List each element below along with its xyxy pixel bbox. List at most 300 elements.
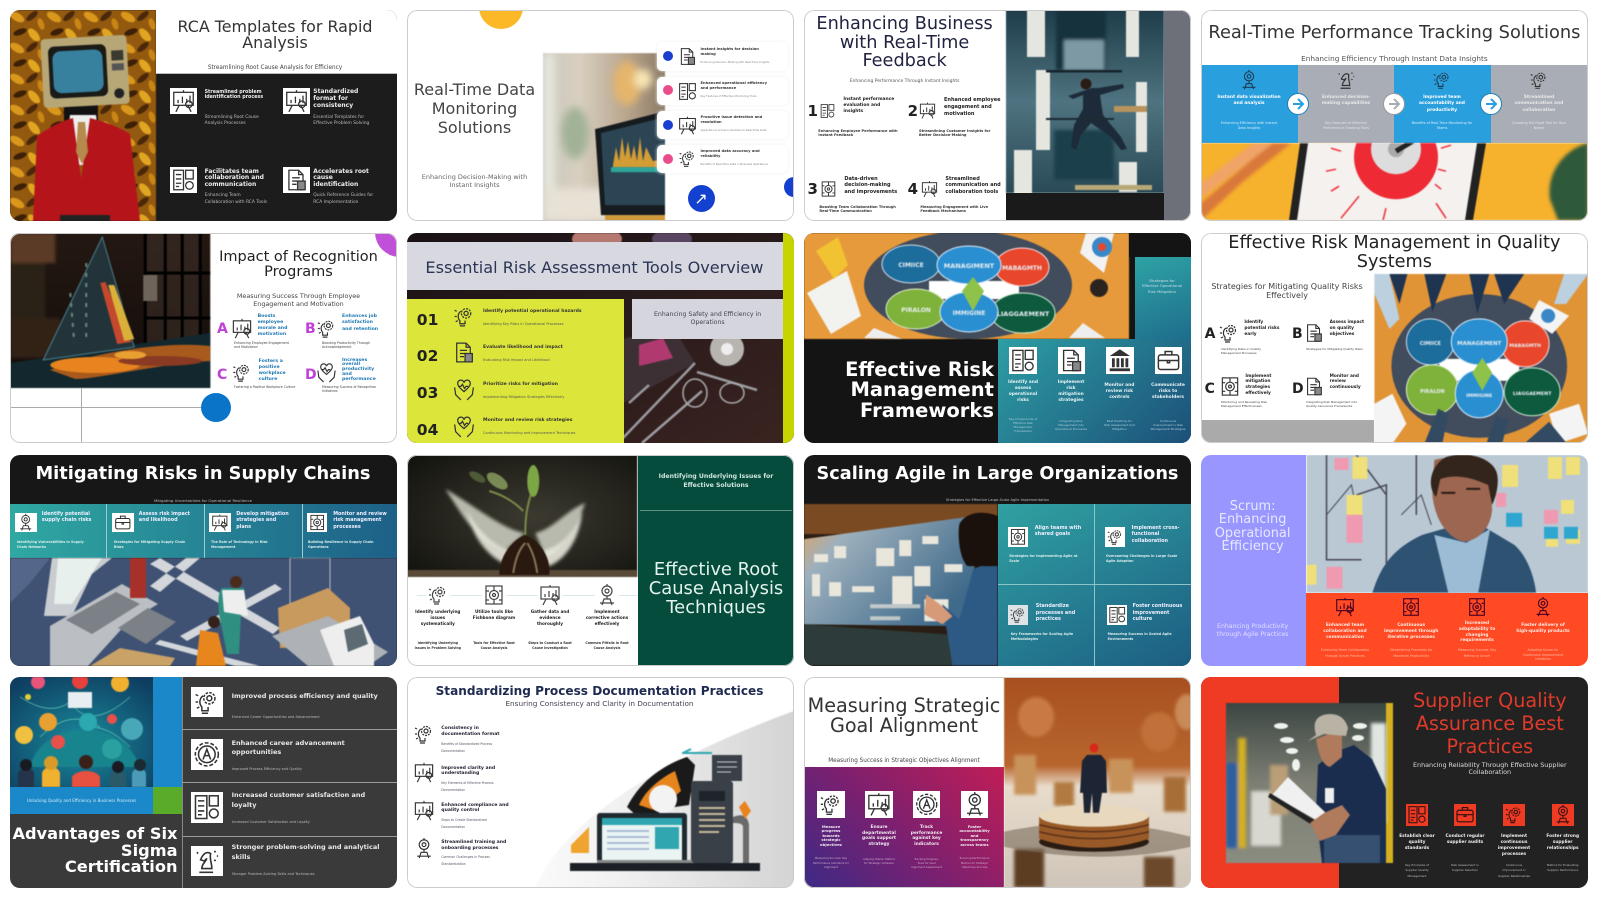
item description: Strategies for Implementing Agile at — [1009, 554, 1077, 558]
item heading: high-quality products — [1516, 629, 1570, 634]
item heading: strategies — [1245, 385, 1270, 390]
title: Essential Risk Assessment Tools Overview — [425, 258, 763, 276]
subtitle: Enhancing Productivity — [1217, 623, 1288, 630]
button: arrow — [688, 184, 714, 212]
item heading: Foster continuous — [1133, 603, 1182, 609]
photo: meeting table overhead: LIAGGAEMENT — [1512, 390, 1552, 396]
item description: and Motivation — [234, 345, 258, 349]
item heading: supplier audits — [1447, 840, 1483, 845]
item heading: onboarding processes — [441, 846, 498, 851]
button: partial circle — [784, 177, 804, 197]
item description — [818, 128, 898, 137]
teal grid — [998, 504, 1191, 666]
item heading: collaboration — [1132, 538, 1168, 544]
item description: Enhanced Career Opportunities and Advancement — [232, 715, 320, 719]
number 2: 2 — [908, 102, 918, 120]
item description: Identifying Risks in Quality — [1221, 347, 1261, 351]
bullet — [663, 154, 673, 164]
column 4 — [1490, 65, 1588, 143]
subtitle: Enhancing Efficiency Through Instant Data Insights — [1301, 54, 1488, 63]
photo: meeting table with overlapping circles: CIMIICE — [898, 262, 924, 268]
item description — [313, 114, 369, 126]
item description: Key Features of Effective Monitoring Tools — [700, 94, 757, 98]
icon: gears head — [1530, 72, 1546, 89]
item heading — [236, 511, 289, 531]
icon: improvement — [1107, 605, 1127, 625]
title — [845, 360, 994, 421]
item description: Steps to Conduct a Root — [528, 640, 572, 644]
icon: person target — [1532, 596, 1554, 618]
item description: Metrics for Evaluating — [1547, 863, 1578, 867]
item description: Continuous Monitoring and Improvement Techniques — [483, 431, 576, 435]
item description: Essential Templates for — [313, 114, 364, 120]
title: with Real-Time — [840, 32, 969, 52]
item heading: Identify underlying — [415, 609, 460, 614]
item description: Documentation — [441, 749, 465, 753]
item description: Aligning Teams: Matrics — [863, 857, 895, 861]
item heading: cause — [313, 174, 333, 181]
item description: Feedback Mechanisms — [920, 209, 966, 213]
icon: network — [1400, 596, 1422, 618]
item heading: accountability — [959, 828, 990, 833]
item heading: continuous — [1501, 840, 1527, 845]
item heading — [700, 114, 762, 124]
item heading: Foster — [968, 824, 981, 829]
item heading: motivation — [944, 110, 974, 116]
item heading: making — [700, 52, 716, 56]
item heading: Standardized — [313, 88, 358, 95]
item description: Key Elements of Effective Process — [441, 781, 493, 785]
header band — [156, 10, 398, 74]
item heading: relationships — [1547, 846, 1579, 851]
item heading — [700, 80, 767, 90]
subtitle: Engagement and Motivation — [253, 300, 344, 308]
item heading: Measure — [822, 824, 840, 829]
item heading: Instant performance — [843, 97, 894, 102]
item description: Cause Analysis — [481, 646, 507, 650]
item description: Choosing the Right Tool for Your — [1512, 120, 1566, 124]
item heading — [1419, 95, 1465, 114]
item heading: Implement — [594, 609, 620, 614]
item description: Integrating Risk Management into — [1306, 400, 1357, 404]
item description: Metrics in Scrum — [1464, 654, 1490, 658]
item description — [17, 540, 84, 549]
title: Real-Time Performance Tracking Solutions — [1208, 22, 1580, 43]
decoration: purple corner — [375, 206, 425, 256]
title: Effective Root — [654, 559, 778, 580]
subtitle: Measuring Success Through Employee — [237, 292, 360, 300]
card: insight 4 — [657, 145, 788, 173]
item heading: Enhanced team — [1326, 623, 1364, 628]
item description: Applications Across Industries for Real-Time Data — [700, 128, 766, 132]
card: insight 1 — [657, 42, 788, 71]
subtitle — [1217, 623, 1288, 640]
photo: meeting table with overlapping circles: LIAGGAEMENT — [997, 310, 1050, 318]
item heading: Implement — [1058, 380, 1084, 384]
icon: target — [595, 583, 619, 607]
icon: truck — [112, 513, 134, 532]
item heading: Increases — [342, 358, 367, 362]
icon: hands with stars — [315, 360, 338, 384]
title: Certification — [65, 857, 178, 876]
item description — [313, 192, 374, 205]
item description: Boosting Team Collaboration Through — [819, 205, 896, 209]
item heading — [232, 739, 345, 757]
item heading — [204, 168, 264, 188]
item description: Boosting Productivity Through — [322, 341, 370, 345]
item description — [528, 640, 572, 650]
item heading: supply chain risks — [42, 517, 91, 523]
item description: Measuring Success: Key — [815, 856, 847, 860]
subtitle — [654, 311, 761, 326]
photo: meeting table overhead: MANAGEMENT — [1457, 340, 1501, 346]
item heading: objectives — [820, 842, 842, 847]
item description: Operations — [308, 545, 329, 549]
item heading: reliability — [700, 154, 720, 158]
item heading: Prioritize risks for mitigation — [483, 382, 558, 386]
item heading: early — [1244, 332, 1257, 336]
item heading: supplier — [1553, 840, 1573, 845]
item description: Continuous — [1160, 418, 1176, 422]
purple column — [1201, 455, 1306, 666]
blue caption band — [10, 787, 153, 814]
row divider — [182, 835, 397, 838]
item description: Supplier Performance — [1547, 868, 1578, 872]
item heading: and analysis — [1234, 101, 1264, 106]
icon: board — [230, 316, 254, 340]
item description: Common Pitfalls in Root — [585, 640, 629, 644]
number 3: 3 — [808, 180, 818, 198]
item heading: accountability and — [1419, 101, 1465, 106]
item heading — [441, 840, 506, 851]
item description: Measuring Engagement with Live — [920, 205, 988, 209]
title: Frameworks — [860, 399, 994, 422]
title: Goal Alignment — [830, 714, 978, 737]
item heading — [1104, 382, 1134, 400]
title: Effective Risk Management in Quality — [1228, 233, 1560, 253]
icon: media — [1218, 374, 1242, 398]
item description — [441, 854, 490, 868]
item description: Risk Assessment in — [1451, 863, 1479, 867]
item heading: Streamlined — [945, 176, 980, 182]
subtitle: Collaboration — [1468, 768, 1511, 776]
title: Monitoring — [432, 99, 517, 118]
item heading: Enhances job — [342, 314, 377, 318]
title — [649, 561, 783, 617]
title: Programs — [264, 264, 333, 280]
panel: Effective Risk Management Frameworks — [804, 232, 1191, 443]
number 01: 01 — [417, 310, 438, 328]
item description — [1523, 648, 1563, 662]
item heading — [1322, 95, 1370, 108]
title — [1228, 234, 1560, 272]
photo: glowing pyramid in dark room — [10, 232, 210, 388]
item description: Collaboration with RCA Tools — [205, 200, 267, 205]
item description: Streamlining Root Cause — [205, 114, 259, 120]
item heading: thoroughly — [537, 621, 563, 626]
item description: Tracking Progress: — [914, 857, 939, 861]
item description: Continuous Improvement — [1523, 653, 1563, 657]
grey strip — [1164, 10, 1191, 221]
icon: monitoring — [307, 513, 327, 532]
item description: Risks — [114, 545, 124, 549]
item description — [1306, 401, 1357, 409]
item description: Improved Process Efficiency and Quality — [232, 767, 302, 771]
icon: audit — [1454, 804, 1476, 826]
arrow 2 — [1383, 93, 1405, 115]
blue strip — [153, 677, 182, 787]
item heading — [259, 358, 286, 382]
item heading — [1036, 603, 1075, 623]
item heading: engagement and — [944, 104, 992, 110]
item description — [322, 342, 370, 350]
panel: Measuring Strategic Goal Alignment — [804, 677, 1191, 888]
panel: Scaling Agile in Large Organizations — [804, 455, 1191, 666]
item heading: Implement — [1245, 374, 1271, 378]
panel: Scrum: Enhancing Operational Efficiency — [1201, 455, 1588, 666]
title — [816, 14, 993, 71]
item description: Fostering a Positive Workplace Culture — [234, 385, 295, 389]
icon: strategy board — [412, 799, 436, 822]
item heading: culture — [1133, 616, 1152, 622]
item heading: Consistency in — [441, 726, 479, 731]
item heading — [441, 726, 500, 737]
item description: Instant Feedback — [818, 133, 853, 137]
item heading — [1058, 380, 1084, 404]
item heading: improvement through — [1384, 629, 1438, 634]
item description — [1009, 416, 1037, 433]
photo: meeting table overhead: IMMIGINE — [1466, 392, 1492, 398]
gradient panel — [804, 767, 1004, 888]
card: insight 2 — [657, 77, 788, 105]
item heading: operational — [1009, 392, 1037, 396]
item description: Measuring Success of Recognition — [322, 385, 376, 389]
item heading: and — [970, 833, 978, 838]
item description: Alignment — [824, 865, 838, 869]
letter C: C — [1205, 381, 1215, 397]
item description: Identifying Underlying — [418, 640, 458, 644]
icon: pie chart — [170, 167, 197, 193]
item description: Management Effectiveness — [1221, 404, 1262, 408]
panel: Real-Time Performance Tracking Solutions — [1201, 10, 1588, 221]
item description: for Strategic Cohesion — [864, 861, 894, 865]
item heading: Continuous — [1397, 623, 1425, 628]
icon: plans — [209, 513, 231, 532]
item heading: review — [1330, 379, 1346, 384]
item description: Risk Assessment and — [1104, 423, 1135, 427]
subtitle: Enhancing Safety and Efficiency in — [654, 311, 761, 318]
item description — [322, 386, 376, 394]
panel: Essential Risk Assessment Tools Overview — [407, 232, 794, 443]
item description: Benefits of Real-Time Data in Business Operations — [700, 162, 768, 166]
item description — [1055, 418, 1087, 431]
item description — [819, 205, 896, 213]
item heading: potential risks — [1244, 326, 1279, 330]
item description: Data Insights — [1238, 126, 1260, 130]
title: Impact of Recognition — [219, 249, 378, 265]
title: Effective Risk — [845, 358, 994, 381]
item heading: Boosts — [258, 314, 275, 318]
panel: RCA Templates for Rapid Analysis — [10, 10, 397, 221]
photo: dark desk with pens and glasses — [407, 232, 794, 444]
item heading — [1384, 623, 1438, 641]
title: Analysis — [242, 33, 308, 52]
item description — [1104, 418, 1135, 431]
item heading: employee — [258, 320, 283, 324]
icon: briefcase — [1155, 346, 1182, 374]
item description: Implementing Mitigation Strategies Effectively — [483, 395, 564, 399]
item heading: Align teams with — [1035, 525, 1081, 531]
item heading: collaboration — [1523, 108, 1555, 113]
item heading: morale and — [258, 326, 287, 330]
item description: Key Frameworks for Scaling Agile — [1011, 632, 1073, 636]
item heading — [1498, 834, 1530, 858]
photo: warehouse inspector with clipboard — [1226, 703, 1392, 863]
item heading — [1330, 320, 1364, 338]
photo: meeting table overhead: CIMIICE — [1419, 340, 1441, 346]
title — [808, 696, 1000, 736]
item description: Maximum Productivity — [1393, 654, 1429, 658]
subtitle: Enhancing Performance Through Instant Insights — [850, 79, 959, 84]
item description — [1009, 554, 1077, 563]
icon: team target — [482, 583, 506, 607]
item description: Benefits of Standardized Process — [441, 742, 492, 746]
item description: Best Practices for — [1107, 418, 1132, 422]
item heading: performance — [342, 377, 376, 382]
icon: gear — [1105, 527, 1125, 547]
item description: Strategies for Mitigating Supply Chain — [114, 540, 185, 544]
item description: Frameworks — [1014, 429, 1032, 433]
item heading: evaluation and — [843, 103, 880, 108]
photo: figure standing on coin stack — [1004, 677, 1191, 888]
item heading: collaboration and — [1323, 629, 1367, 634]
photo: meeting table overhead: PIRALON — [1420, 388, 1444, 394]
item description — [960, 856, 989, 869]
letter B: B — [305, 320, 316, 336]
title: Supplier Quality — [1413, 689, 1567, 712]
item heading: shared goals — [1035, 531, 1070, 537]
item description: Tools for Effective Root — [473, 640, 515, 644]
item heading: objectives — [1330, 332, 1354, 336]
item heading — [342, 358, 376, 383]
item description: Documentation — [441, 825, 465, 829]
item description — [1512, 120, 1566, 132]
divider — [203, 504, 205, 558]
icon: data — [538, 583, 562, 607]
panel: Supplier Quality Assurance Best Practices — [1201, 677, 1588, 888]
item description: Measuring Success in Scaled Agile — [1108, 632, 1172, 636]
item description — [1498, 863, 1530, 879]
item heading: Improved team — [1423, 95, 1461, 100]
item heading: Monitor and review risk strategies — [483, 418, 573, 422]
item heading: Improved process efficiency and quality — [232, 692, 378, 700]
icon: gear bulb — [679, 151, 694, 167]
title — [219, 250, 378, 280]
icon: worker — [412, 837, 436, 860]
item heading: making capabilities — [1322, 101, 1370, 106]
divider — [301, 504, 304, 558]
item description: Increased Customer Satisfaction and Loyalty — [232, 820, 310, 824]
item description — [1011, 632, 1073, 641]
photo: sapling with soil splash — [407, 455, 638, 577]
item heading: Enhanced compliance and — [441, 803, 509, 808]
title: Assurance Best — [1416, 712, 1564, 735]
item description — [441, 741, 492, 755]
number 04: 04 — [417, 420, 438, 438]
item heading: effectively — [595, 621, 619, 626]
item description: Enhancing Team Collaboration — [1321, 648, 1369, 652]
item heading: motivation — [258, 332, 286, 336]
item heading: Enhanced operational efficiency — [700, 80, 767, 84]
photo: meeting table with overlapping circles: IMMIGINE — [953, 310, 985, 316]
item description: Agile Adoption — [1106, 559, 1133, 563]
row divider — [182, 781, 397, 784]
icon: shipping — [15, 513, 37, 532]
item heading: effectively — [1245, 391, 1271, 396]
panel: Effective Risk Management in Quality Systems — [1201, 232, 1588, 443]
item heading: standards — [1405, 846, 1429, 851]
icon: heart shield — [450, 414, 476, 438]
black base — [1006, 193, 1164, 221]
subtitle: Strategies for Mitigating Quality Risks — [1211, 282, 1363, 291]
item heading: positive — [259, 364, 280, 370]
title — [414, 80, 535, 137]
title: Advantages of Six — [12, 824, 178, 843]
item description: Performance Tracking Tools — [1323, 126, 1369, 130]
subtitle — [1211, 282, 1363, 301]
title: Scrum: — [1230, 499, 1275, 514]
item heading — [441, 803, 509, 814]
item heading: practices — [1036, 616, 1061, 622]
icon: strategies — [1058, 346, 1085, 374]
subtitle — [1413, 762, 1567, 777]
item heading — [944, 96, 1001, 116]
icon: document person — [1303, 320, 1325, 344]
item description — [813, 856, 849, 869]
item description: Mitigation — [1112, 427, 1127, 431]
item heading: improvement — [1498, 846, 1530, 851]
caption: Effective Operational — [1142, 283, 1182, 288]
item description: Initiatives — [1535, 657, 1551, 661]
item heading: communication — [205, 181, 256, 188]
item heading: across teams — [960, 842, 989, 847]
photo: target on phone on yellow desk — [1201, 143, 1588, 221]
item description — [920, 205, 988, 213]
item heading — [959, 825, 990, 847]
photo: man leaping in inverted building — [1005, 11, 1164, 194]
item heading — [1515, 95, 1563, 114]
item description: Enhancing Efficiency with Instant — [1221, 120, 1277, 124]
backdrop: diagonal grey sweep — [407, 677, 794, 888]
title: Standardizing Process Documentation Practices — [436, 684, 763, 698]
item heading: systematically — [421, 621, 455, 626]
grey base — [1201, 420, 1374, 443]
icon: bulb — [1008, 605, 1028, 625]
item heading: on quality — [1330, 326, 1354, 330]
photo: meeting table overhead: MABAGMTH — [1509, 342, 1541, 348]
item heading — [1132, 525, 1179, 545]
item description — [1451, 863, 1479, 874]
subtitle: Effective Solutions — [683, 482, 749, 489]
item heading — [441, 766, 495, 776]
item heading: Identify — [1244, 320, 1263, 324]
item heading: indicators — [914, 842, 939, 847]
item heading — [1245, 374, 1271, 397]
item heading: Utilize tools like — [475, 609, 513, 614]
subtitle: Operations — [691, 318, 725, 326]
icon: podium — [822, 181, 836, 197]
item description: Management — [211, 545, 235, 549]
